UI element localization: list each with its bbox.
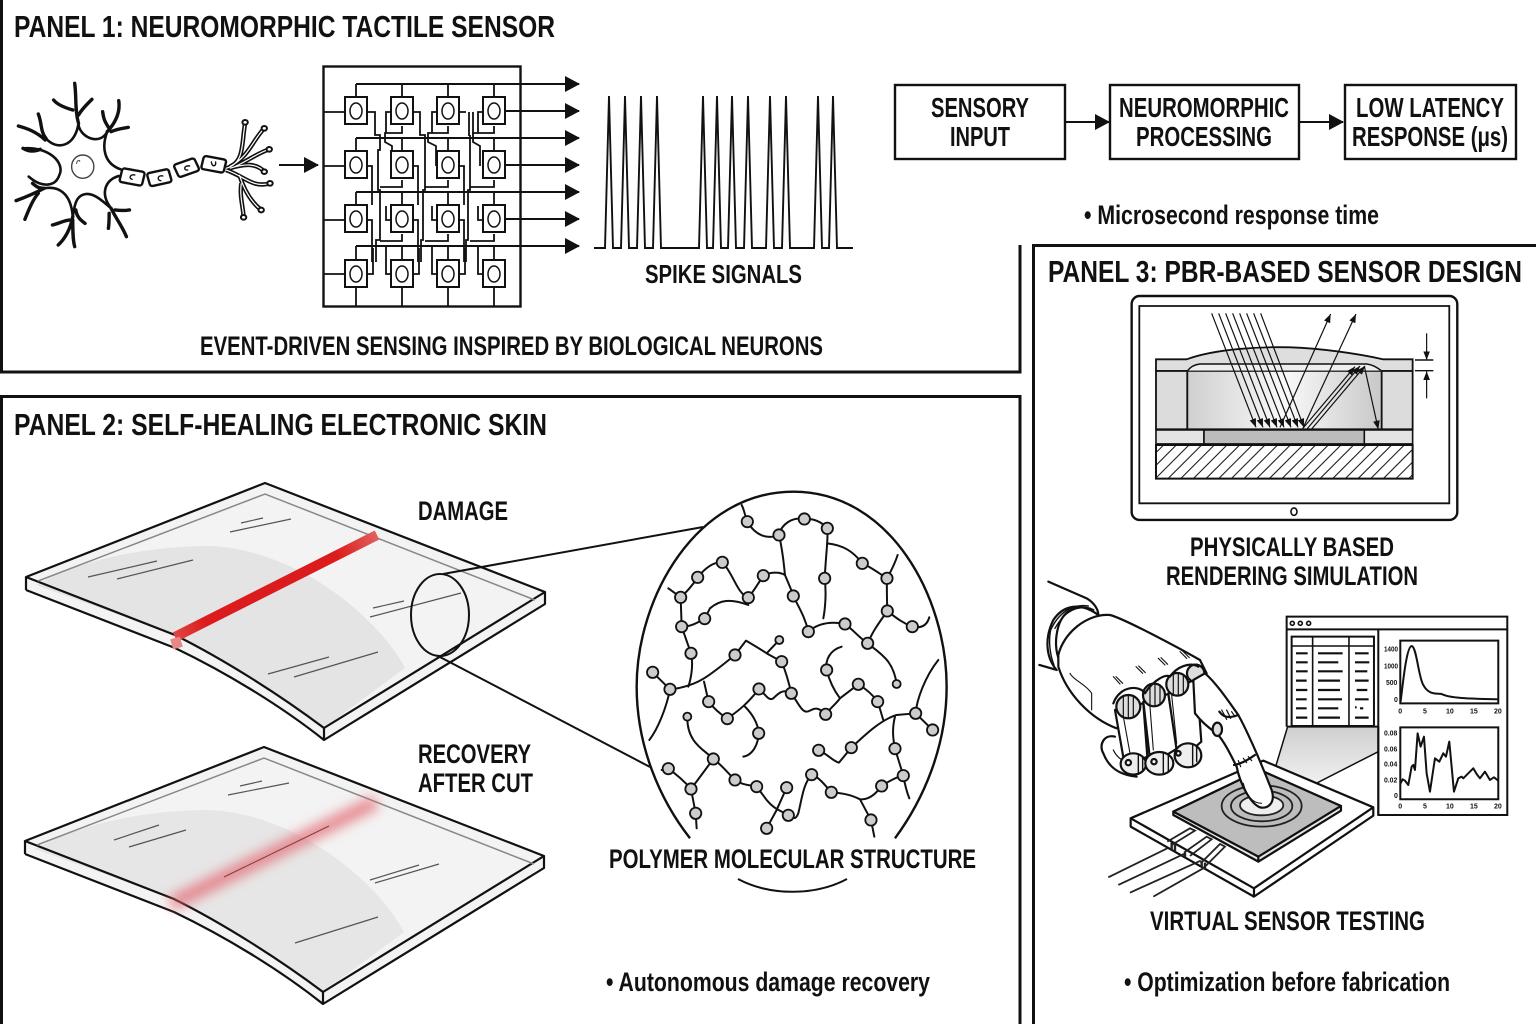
chart: upper response curve: 1400 xyxy=(1384,646,1398,653)
chart: lower noisy signal: 20 xyxy=(1494,804,1502,811)
label: physically based rendering simulation: PHYSICALLY BASED xyxy=(1190,532,1394,562)
bullet: optimization before fabrication: • Optimization before fabrication xyxy=(1124,967,1450,997)
robot hand and virtual testing xyxy=(1039,582,1507,897)
chart: lower noisy signal: 0.08 xyxy=(1384,730,1397,737)
arrow: input to processing xyxy=(1066,121,1109,123)
panel: self-healing electronic skin xyxy=(2,396,1020,1024)
chart: lower noisy signal xyxy=(1384,727,1502,811)
connector xyxy=(1108,828,1225,897)
chart: lower noisy signal: 0.02 xyxy=(1384,778,1397,785)
monitor with optical simulation xyxy=(1130,296,1457,520)
panel: neuromorphic tactile sensor xyxy=(2,0,1516,372)
chart: lower noisy signal: 0 xyxy=(1398,804,1402,811)
chart: lower noisy signal: 10 xyxy=(1446,804,1454,811)
sensor board xyxy=(1131,761,1373,897)
chart: spike signals xyxy=(594,96,853,248)
bullet: autonomous recovery: • Autonomous damage recovery xyxy=(606,967,930,997)
icon: neuron xyxy=(16,83,273,247)
index finger xyxy=(1193,673,1273,808)
chart: upper response curve: 5 xyxy=(1423,708,1427,715)
box: sensory input: SENSORY xyxy=(931,92,1029,123)
label: damage: DAMAGE xyxy=(418,496,508,526)
label: recovery after cut: RECOVERY xyxy=(418,739,531,769)
lens lower arc xyxy=(738,879,847,892)
polymer molecular structure xyxy=(637,492,947,838)
healed stripe xyxy=(171,802,376,904)
chart: upper response curve: 20 xyxy=(1494,708,1502,715)
sensor array xyxy=(324,66,579,306)
label: recovery after cut: AFTER CUT xyxy=(418,768,533,798)
chart: lower noisy signal: 5 xyxy=(1423,804,1427,811)
caption: event-driven sensing: EVENT-DRIVEN SENSING INSPIRED BY BIOLOGICAL NEURONS xyxy=(200,331,823,361)
heading: panel 2: PANEL 2: SELF-HEALING ELECTRONIC SKIN xyxy=(14,407,547,442)
label: spike signals: SPIKE SIGNALS xyxy=(645,259,802,289)
heading: panel 1: PANEL 1: NEUROMORPHIC TACTILE SENSOR xyxy=(14,9,555,44)
label: polymer molecular structure: POLYMER MOLECULAR STRUCTURE xyxy=(609,844,976,874)
box: low latency response xyxy=(1345,85,1516,159)
data table xyxy=(1292,637,1374,726)
chart: upper response curve: 1000 xyxy=(1384,663,1398,670)
chart: lower noisy signal: 0.04 xyxy=(1384,762,1397,769)
bullet: microsecond response: • Microsecond response time xyxy=(1084,200,1379,230)
sheet: recovered xyxy=(25,747,544,1004)
chart: lower noisy signal: 15 xyxy=(1470,804,1478,811)
damage stripe xyxy=(175,535,377,637)
arrow: neuron to array xyxy=(279,164,318,166)
box: sensory input: INPUT xyxy=(950,121,1010,152)
chart: lower noisy signal: 0.06 xyxy=(1384,747,1397,754)
chart: upper response curve xyxy=(1384,641,1502,715)
flow diagram xyxy=(895,85,1516,159)
chart: upper response curve: 0 xyxy=(1394,697,1398,704)
chart: upper response curve: 10 xyxy=(1446,708,1454,715)
data cone xyxy=(1272,727,1378,793)
label: physically based rendering simulation xyxy=(1166,532,1418,591)
magnifier lens and leader lines xyxy=(411,527,703,767)
thumb xyxy=(1101,736,1137,777)
box: neuromorphic processing xyxy=(1110,85,1299,159)
box: neuromorphic processing: NEUROMORPHIC xyxy=(1119,92,1289,123)
chart: lower noisy signal: 0 xyxy=(1394,793,1398,800)
simulation window xyxy=(1287,617,1507,815)
label: recovery after cut xyxy=(418,739,533,798)
chart: upper response curve: 15 xyxy=(1470,708,1478,715)
chart: upper response curve: 0 xyxy=(1398,708,1402,715)
wrist xyxy=(1039,582,1273,808)
box: sensory input xyxy=(895,85,1065,159)
back of hand xyxy=(1058,615,1207,728)
sheet: damaged xyxy=(26,483,545,740)
label: physically based rendering simulation: RENDERING SIMULATION xyxy=(1166,561,1418,591)
panel: PBR-based sensor design xyxy=(1034,246,1536,1024)
arrow: processing to response xyxy=(1300,121,1343,123)
curled fingers xyxy=(1115,703,1147,767)
chart: upper response curve: 500 xyxy=(1386,680,1397,687)
label: virtual sensor testing: VIRTUAL SENSOR TESTING xyxy=(1150,906,1425,936)
box: neuromorphic processing: PROCESSING xyxy=(1136,121,1272,152)
